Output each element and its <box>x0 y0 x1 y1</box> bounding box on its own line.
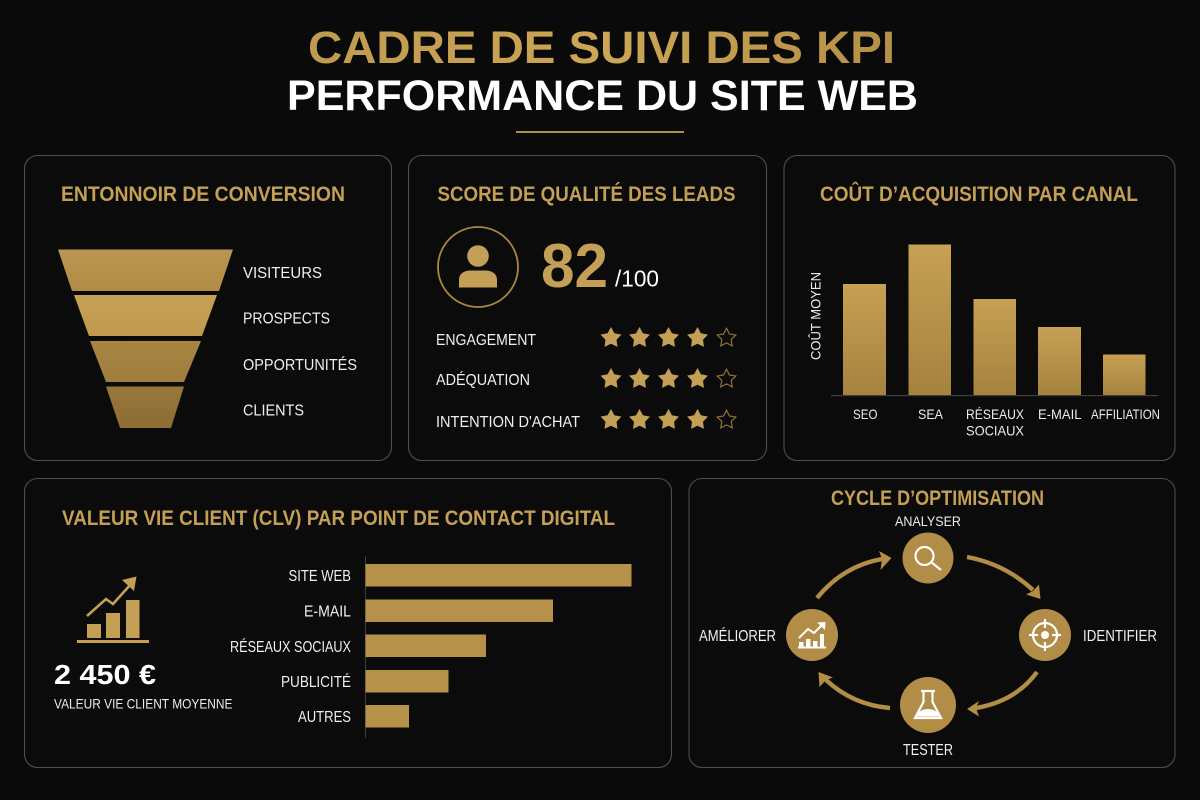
channel labels: SEO <box>853 406 878 422</box>
rating: engagement: ENGAGEMENT <box>436 332 536 349</box>
cycle labels: IDENTIFIER <box>1083 628 1157 645</box>
channel labels: E-MAIL <box>1038 406 1082 422</box>
rating: purchase intent: INTENTION D'ACHAT <box>436 414 580 431</box>
panel: acquisition cost <box>784 156 1175 460</box>
icon: person in circle <box>438 227 518 307</box>
cycle labels: AMÉLIORER <box>699 628 776 645</box>
funnel labels: OPPORTUNITÉS <box>243 357 357 374</box>
rating: fit <box>436 368 736 389</box>
heading: acquisition cost: COÛT D’ACQUISITION PAR CANAL <box>820 182 1138 206</box>
touchpoint labels: PUBLICITÉ <box>281 674 351 691</box>
clv caption: VALEUR VIE CLIENT MOYENNE <box>54 696 232 712</box>
channel labels: AFFILIATION <box>1091 406 1160 422</box>
funnel chart <box>58 250 233 428</box>
arrow: test to improve <box>818 672 890 708</box>
arrow: analyse to identify <box>967 557 1040 599</box>
score value: /100 <box>615 266 659 292</box>
node: tester <box>900 677 956 733</box>
title: PERFORMANCE DU SITE WEB <box>287 72 918 120</box>
arrow: improve to analyse <box>817 551 892 598</box>
funnel labels: VISITEURS <box>243 265 322 282</box>
touchpoint labels: RÉSEAUX SOCIAUX <box>230 639 352 656</box>
bar chart: clv by touchpoint <box>365 556 632 738</box>
rating: fit: ADÉQUATION <box>436 372 530 389</box>
node: ameliorer <box>786 609 838 661</box>
axis label: COÛT MOYEN <box>808 272 824 360</box>
channel labels: SOCIAUX <box>966 422 1025 438</box>
panel: lead quality score <box>408 156 766 460</box>
cycle labels <box>699 513 1157 759</box>
channel labels <box>853 406 1160 438</box>
heading: lead score: SCORE DE QUALITÉ DES LEADS <box>438 183 736 206</box>
channel labels: SEA <box>918 406 944 422</box>
panel: customer lifetime value <box>24 478 672 768</box>
node: identifier <box>1019 609 1071 661</box>
title: CADRE DE SUIVI DES KPI <box>308 22 895 73</box>
heading: cycle: CYCLE D’OPTIMISATION <box>831 487 1044 510</box>
touchpoint labels: SITE WEB <box>288 568 351 585</box>
cycle labels: TESTER <box>903 742 953 759</box>
touchpoint labels: AUTRES <box>298 709 351 726</box>
panel: conversion funnel <box>24 156 392 460</box>
rating: engagement <box>436 327 736 349</box>
funnel labels: CLIENTS <box>243 402 304 420</box>
touchpoint labels: E-MAIL <box>304 604 351 620</box>
heading: funnel: ENTONNOIR DE CONVERSION <box>61 183 345 206</box>
title <box>287 22 918 120</box>
rating: purchase intent <box>436 409 736 431</box>
heading: clv: VALEUR VIE CLIENT (CLV) PAR POINT DE CONTACT DIGITAL <box>62 507 615 530</box>
funnel labels: PROSPECTS <box>243 310 330 328</box>
touchpoint labels <box>230 568 352 726</box>
funnel labels <box>243 265 357 420</box>
node: analyser <box>902 532 954 584</box>
icon: growth chart <box>77 576 149 643</box>
clv value: 2 450 € <box>54 659 156 690</box>
cycle labels: ANALYSER <box>895 513 961 529</box>
arrow: identify to test <box>967 672 1037 716</box>
score value: 82 <box>541 232 608 301</box>
channel labels: RÉSEAUX <box>966 406 1025 422</box>
panel: optimisation cycle <box>689 478 1175 768</box>
bar chart: cost by channel <box>831 244 1158 396</box>
score value <box>541 232 659 301</box>
